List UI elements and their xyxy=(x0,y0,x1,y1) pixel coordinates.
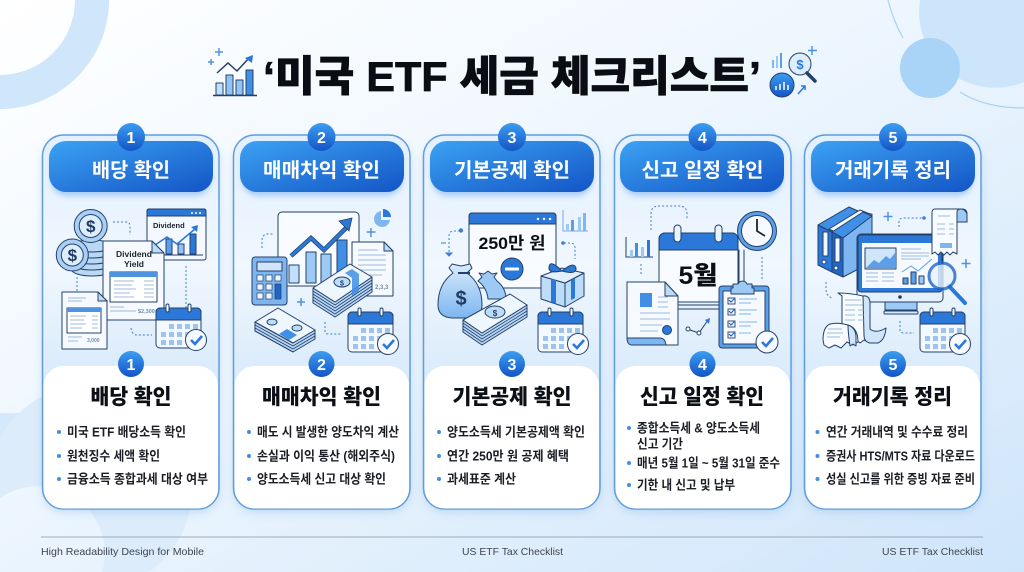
content panel xyxy=(234,366,409,508)
header pill xyxy=(430,141,594,196)
content panel: 기본공제 확인 xyxy=(452,386,572,409)
illustration: dividend documents: Yield xyxy=(124,259,144,269)
number badge xyxy=(688,123,716,151)
header pill xyxy=(240,141,404,196)
illustration: filing schedule: 5월 xyxy=(678,262,718,290)
illustration: basic deduction: 250만 원 xyxy=(478,234,546,253)
illustration: dividend documents: 3,000 xyxy=(87,338,100,344)
illustration: dividend documents: $2,300 xyxy=(138,309,155,315)
illustration: basic deduction xyxy=(438,210,588,354)
number badge xyxy=(117,123,145,151)
content panel: 종합소득세 & 양도소득세 xyxy=(637,420,760,436)
illustration: dividend documents: Dividend xyxy=(153,221,185,230)
illustration: trading gains: 2,3,3 xyxy=(375,285,389,291)
number badge: 3 xyxy=(508,130,517,147)
panel: step 5 xyxy=(804,123,981,512)
number badge: 1 xyxy=(127,130,136,147)
content panel: 성실 신고를 위한 증빙 자료 준비 xyxy=(826,472,975,486)
content panel: 미국 ETF 배당소득 확인 xyxy=(67,424,186,440)
panel: step 1 xyxy=(42,123,219,512)
content panel: 매년 5월 1일 ~ 5월 31일 준수 xyxy=(637,456,780,470)
number badge xyxy=(499,351,525,377)
content panel: 과세표준 계산 xyxy=(447,472,516,486)
content panel: 원천징수 세액 확인 xyxy=(67,448,160,464)
content panel: 연간 거래내역 및 수수료 정리 xyxy=(826,424,968,440)
content panel: 신고 기간 xyxy=(637,436,683,452)
content panel: 연간 250만 원 공제 혜택 xyxy=(447,448,569,464)
illustration: basic deduction: $ xyxy=(493,309,498,318)
content panel: 거래기록 정리 xyxy=(833,386,952,409)
content panel: 매도 시 발생한 양도차익 계산 xyxy=(257,424,399,440)
content panel: 매매차익 확인 xyxy=(262,386,381,409)
footer: US ETF Tax Checklist xyxy=(882,546,983,558)
number badge xyxy=(879,123,907,151)
header pill xyxy=(49,141,213,196)
header pill xyxy=(620,141,784,196)
icon: magnifier and growth badge: $ xyxy=(796,57,804,72)
content panel xyxy=(424,366,599,508)
icon: magnifier and growth badge xyxy=(770,46,817,97)
content panel: 증권사 HTS/MTS 자료 다운로드 xyxy=(826,448,975,464)
content panel: 배당 확인 xyxy=(90,386,172,409)
illustration: dividend documents: $ xyxy=(86,217,96,236)
footer: High Readability Design for Mobile xyxy=(41,546,204,558)
title: ‘미국 ETF 세금 체크리스트’ xyxy=(263,53,761,100)
content panel: 양도소득세 신고 대상 확인 xyxy=(257,472,386,486)
content panel xyxy=(44,366,218,508)
number badge: 1 xyxy=(127,357,136,374)
content panel: 기한 내 신고 및 납부 xyxy=(637,478,735,492)
content panel: 손실과 이익 통산 (해외주식) xyxy=(257,448,395,464)
number badge xyxy=(118,351,144,377)
footer xyxy=(41,537,983,558)
icon: rising chart xyxy=(208,48,257,96)
number badge: 2 xyxy=(317,130,326,147)
number badge: 2 xyxy=(317,357,326,374)
number badge: 5 xyxy=(889,130,898,147)
header pill: 매매차익 확인 xyxy=(263,159,380,182)
number badge xyxy=(498,123,526,151)
content panel xyxy=(616,366,790,508)
header pill: 배당 확인 xyxy=(92,159,170,182)
footer: US ETF Tax Checklist xyxy=(462,546,563,558)
panel: step 2 xyxy=(234,123,410,512)
illustration: filing schedule xyxy=(626,206,778,353)
illustration: basic deduction: $ xyxy=(455,288,467,310)
number badge xyxy=(308,123,336,151)
content panel xyxy=(806,366,980,508)
number badge xyxy=(880,351,906,377)
number badge: 3 xyxy=(508,357,517,374)
illustration: trading gains xyxy=(252,209,398,354)
header pill: 거래기록 정리 xyxy=(835,159,951,182)
content panel: 신고 일정 확인 xyxy=(640,386,764,409)
header pill xyxy=(811,141,975,196)
number badge: 4 xyxy=(698,357,707,374)
header pill: 신고 일정 확인 xyxy=(642,159,764,182)
panel: step 4 xyxy=(614,123,791,512)
number badge: 4 xyxy=(698,130,707,147)
number badge xyxy=(690,351,716,377)
header pill: 기본공제 확인 xyxy=(454,159,570,182)
illustration: trading records xyxy=(818,207,970,354)
illustration: dividend documents: Dividend xyxy=(116,249,152,259)
panel: step 3 xyxy=(424,123,600,512)
number badge: 5 xyxy=(889,357,898,374)
illustration: trading gains: $ xyxy=(340,280,344,288)
content panel: 금융소득 종합과세 대상 여부 xyxy=(67,472,208,486)
number badge xyxy=(308,351,334,377)
illustration: dividend documents: $ xyxy=(68,246,78,265)
content panel: 양도소득세 기본공제액 확인 xyxy=(447,424,585,440)
illustration: dividend documents xyxy=(56,209,206,350)
